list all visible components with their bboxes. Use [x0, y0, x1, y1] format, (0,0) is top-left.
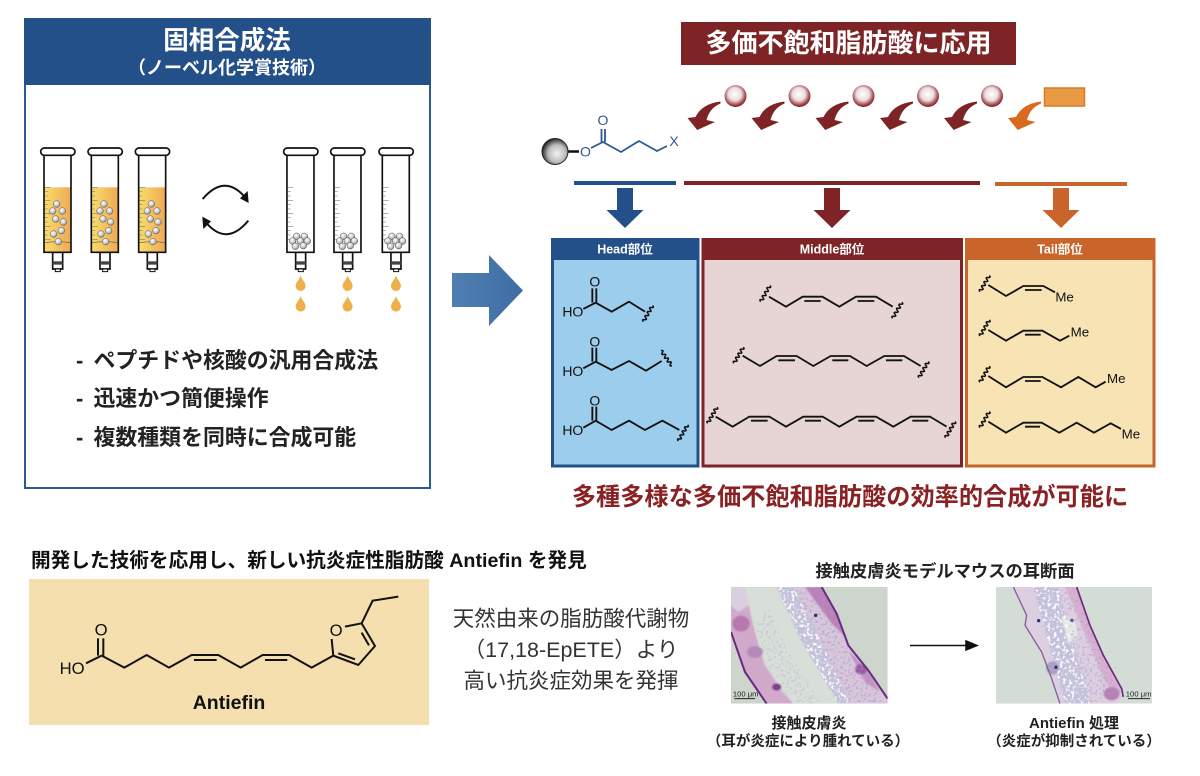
head molecules: O	[589, 333, 600, 349]
tail molecules: Me	[1122, 426, 1140, 441]
head bracket and arrow	[574, 181, 676, 228]
tail molecules: Me	[1107, 371, 1126, 386]
icon: tail building block with curved arrow	[1008, 88, 1084, 130]
panel: Head: Head部位	[597, 242, 653, 256]
molecule: Antiefin: HO	[60, 659, 85, 678]
head molecules	[562, 274, 689, 442]
panel header: （ノーベル化学賞技術）	[128, 57, 326, 78]
label: Antiefin: Antiefin	[193, 692, 265, 714]
middle molecules	[706, 285, 956, 438]
feature list: 迅速かつ簡便操作	[94, 386, 269, 411]
head molecules: HO	[562, 422, 583, 438]
title: application to PUFA	[681, 22, 1016, 65]
molecule: Antiefin: O	[330, 621, 343, 640]
head molecules: O	[589, 393, 600, 409]
micrograph: Antiefin treated: 100 μm	[1126, 689, 1152, 698]
icon: syringes with resin and solution	[41, 148, 170, 272]
icon: resin-bound head building block: X	[669, 133, 679, 149]
panel: Antiefin structure	[29, 579, 429, 725]
panel header: 固相合成法	[163, 27, 291, 55]
caption: Antiefin treatment: （炎症が抑制されている）	[987, 732, 1161, 750]
description text: （17,18-EpETE）より	[464, 638, 678, 662]
arrow: treatment	[910, 641, 977, 650]
caption: contact dermatitis	[707, 714, 909, 750]
icon: syringes draining	[284, 148, 413, 312]
molecule: Antiefin: O	[95, 620, 108, 639]
description text: 高い抗炎症効果を発揮	[463, 669, 679, 693]
caption: Antiefin treatment	[987, 715, 1161, 750]
panel: Tail	[965, 238, 1156, 466]
panel: Head	[551, 238, 699, 466]
head molecules: HO	[562, 363, 583, 379]
caption: Antiefin treatment: Antiefin 処理	[1029, 715, 1119, 732]
middle bracket and arrow	[684, 181, 980, 228]
icon: middle building blocks with curved arrows	[688, 85, 1003, 130]
panel: Tail: Tail部位	[1037, 242, 1083, 256]
tail molecules	[979, 275, 1140, 441]
description text: 天然由来の脂肪酸代謝物	[453, 607, 689, 631]
bottom heading: 開発した技術を応用し、新しい抗炎症性脂肪酸 Antiefin を発見	[31, 549, 587, 572]
feature list	[76, 348, 378, 450]
molecule: Antiefin	[60, 597, 398, 678]
panel header	[24, 18, 431, 85]
feature list: ペプチドや核酸の汎用合成法	[94, 348, 378, 373]
feature list: -	[76, 386, 83, 411]
panel: solid-phase synthesis	[24, 18, 431, 488]
panel: Middle	[702, 238, 963, 466]
description text	[453, 607, 689, 693]
micrograph: Antiefin treated	[996, 587, 1152, 704]
feature list: 複数種類を同時に合成可能	[94, 425, 356, 450]
head molecules: O	[589, 274, 600, 290]
title: application to PUFA: 多価不飽和脂肪酸に応用	[705, 28, 992, 58]
icon: resin-bound head building block	[542, 112, 679, 164]
tail molecules: Me	[1055, 289, 1074, 304]
panel: Middle: Middle部位	[800, 242, 865, 256]
head molecules: HO	[562, 304, 583, 320]
micrograph heading: 接触皮膚炎モデルマウスの耳断面	[815, 561, 1075, 581]
caption: contact dermatitis: 接触皮膚炎	[771, 714, 847, 732]
arrow: left panel to right panel	[452, 255, 523, 326]
icon: resin-bound head building block: O	[598, 112, 609, 128]
micrograph: contact dermatitis	[731, 587, 888, 704]
feature list: -	[76, 425, 83, 450]
icon: resin-bound head building block: O	[580, 144, 591, 160]
tail molecules: Me	[1071, 324, 1089, 339]
caption: contact dermatitis: （耳が炎症により腫れている）	[707, 732, 909, 750]
micrograph: contact dermatitis: 100 μm	[733, 689, 759, 698]
icon: cycle arrows	[202, 186, 249, 234]
feature list: -	[76, 348, 83, 373]
tail bracket and arrow	[995, 182, 1127, 228]
conclusion text: 多種多様な多価不飽和脂肪酸の効率的合成が可能に	[572, 483, 1128, 511]
